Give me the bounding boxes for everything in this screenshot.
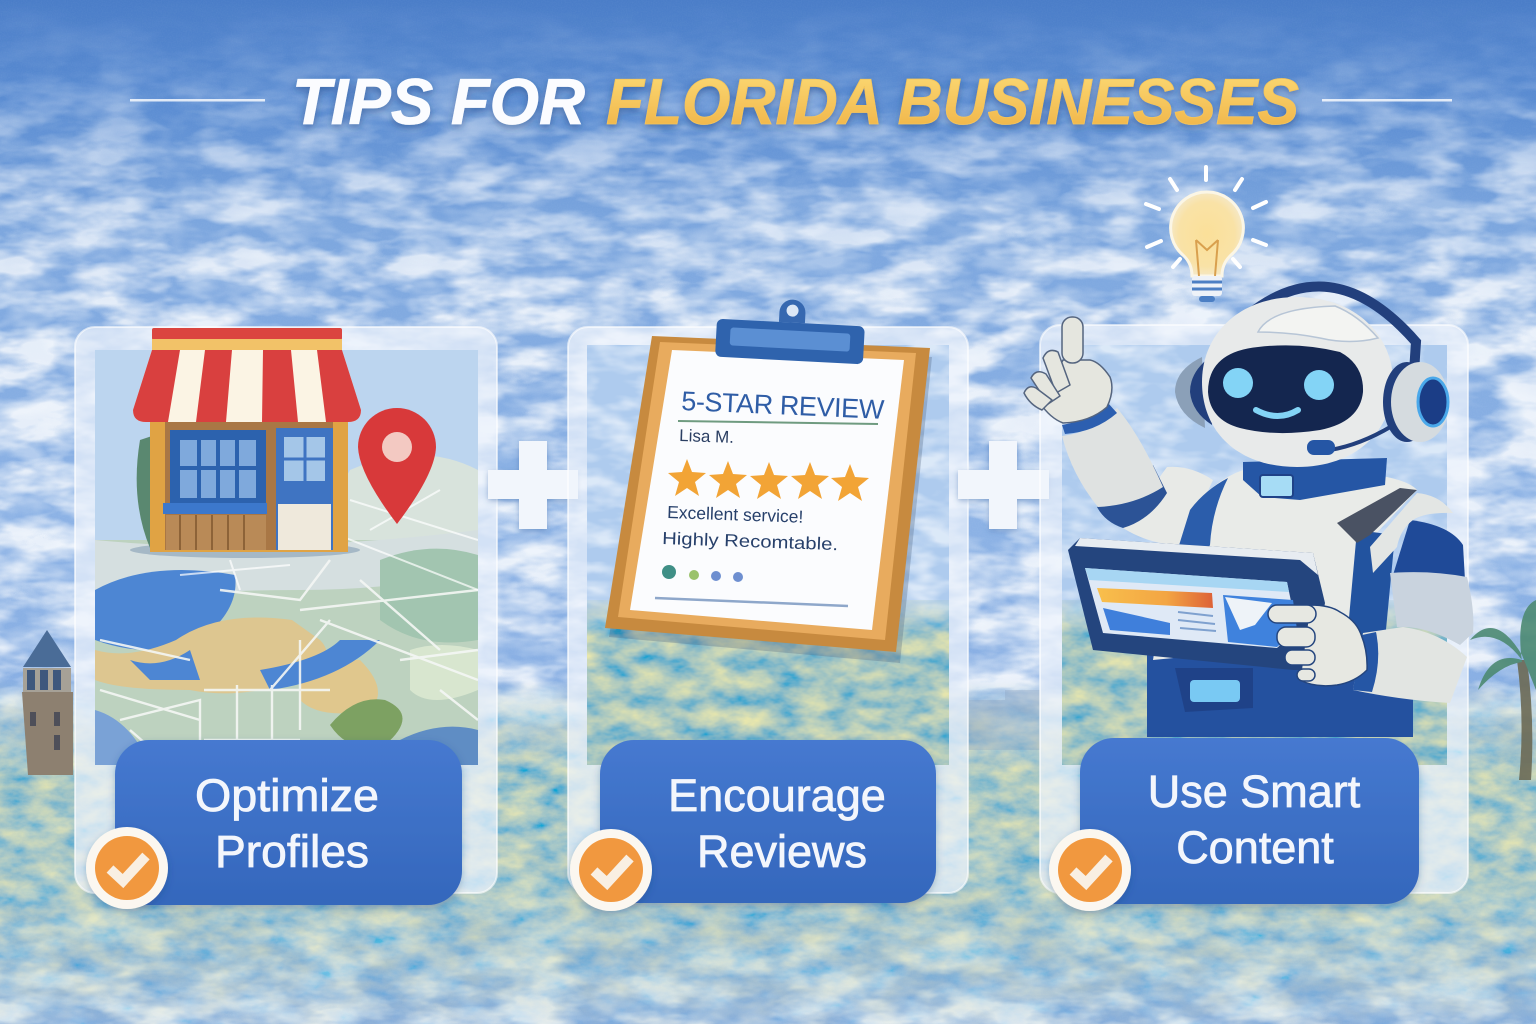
robot left ear [1175,357,1205,428]
label: use smart content [1080,738,1419,904]
icon: five stars [668,459,869,501]
icon: dots [662,565,743,582]
label: encourage reviews: Reviews [697,826,867,877]
robot torso [1153,470,1417,660]
label: optimize profiles: Optimize [195,770,379,821]
robot headset band [1222,286,1416,372]
title: TIPS FOR [292,65,585,138]
icon: check badge [86,827,168,909]
decorative title rule right [1322,99,1452,102]
text: review body [662,502,838,554]
robot raised arm [1123,467,1213,545]
robot tablet [1068,538,1325,670]
text: reviewer: Lisa M. [679,426,734,447]
panel: optimize profiles [75,327,497,909]
label: optimize profiles [115,740,462,905]
decorative title rule left [130,99,265,102]
text: review body: Highly Recomtable. [662,528,838,554]
label: use smart content: Content [1176,822,1334,873]
icon: lightbulb [1146,167,1266,302]
landmark: brick tower [22,630,73,775]
robot hand pointing [1024,317,1112,423]
robot right arm [1393,520,1465,580]
robot legs [1147,655,1413,737]
robot headset [1383,362,1431,442]
label: encourage reviews: Encourage [668,770,886,821]
robot head [1202,297,1393,467]
text: review body: Excellent service! [667,502,804,527]
label: optimize profiles: Profiles [215,826,369,877]
landmark: distant buildings [968,690,1040,750]
title: FLORIDA BUSINESSES [606,65,1299,138]
icon: storefront [130,328,361,558]
panel: use smart content [1024,167,1473,911]
robot hand holding tablet [1268,605,1367,686]
illustration: clipboard [605,296,932,663]
illustration: map [95,350,478,765]
icon: plus 2 [958,441,1049,529]
illustration: sky and bushes [1062,345,1447,770]
illustration: robot [1024,286,1473,737]
robot collar [1243,458,1387,500]
icon: plus 1 [488,441,578,529]
title [292,65,1299,138]
panel: encourage reviews [568,296,968,911]
icon: check badge [570,829,652,911]
text: review heading: 5-STAR REVIEW [681,386,885,425]
icon: location pin [358,408,436,524]
landmark: palm tree [1470,600,1536,780]
illustration: sky and bushes [587,345,949,770]
icon: check badge [1049,829,1131,911]
label: encourage reviews [600,740,936,903]
label: use smart content: Use Smart [1148,766,1361,817]
